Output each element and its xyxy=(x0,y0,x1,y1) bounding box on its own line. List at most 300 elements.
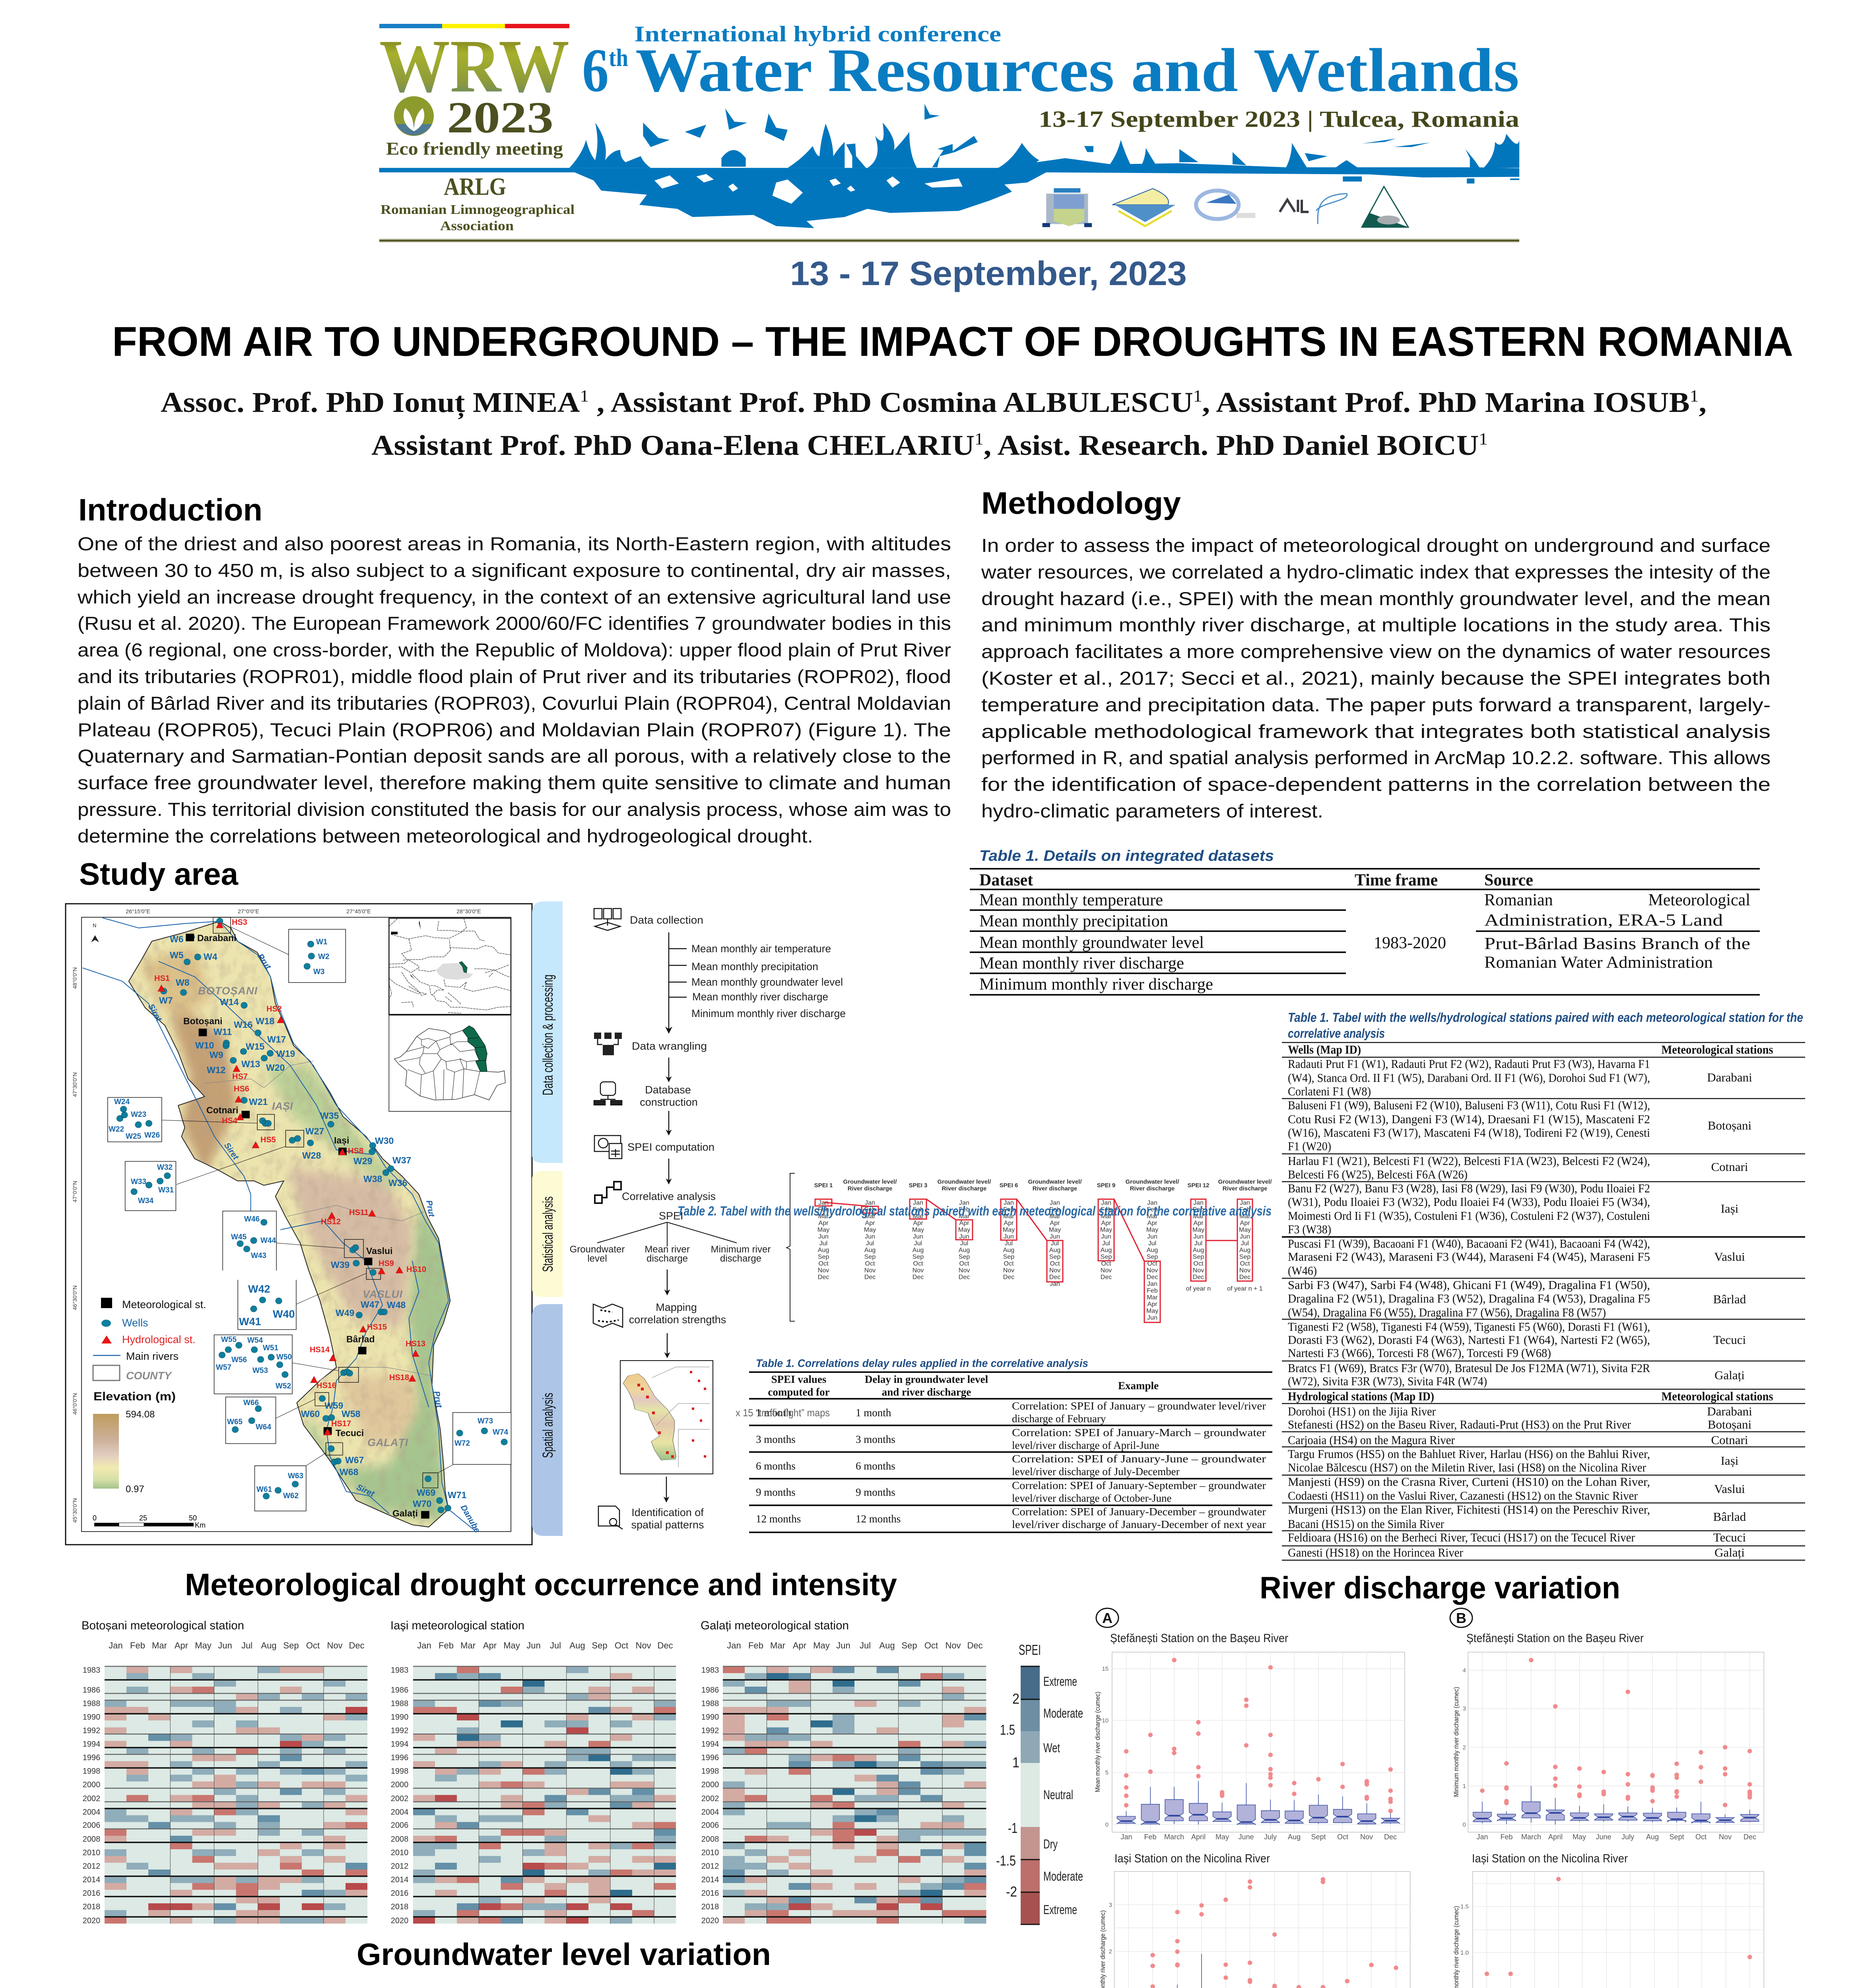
map labels: inset wells: W46 xyxy=(244,1215,260,1223)
SPEI branching xyxy=(597,1210,737,1246)
arrowhead xyxy=(665,1027,672,1034)
month columns: Dec xyxy=(1101,1274,1112,1281)
table text: Dataset xyxy=(979,871,1033,889)
map labels: inset wells: W2 xyxy=(318,953,329,961)
conference subtitle: International hybrid conference xyxy=(634,22,1001,47)
month axis: Apr xyxy=(793,1640,806,1650)
map labels: hydrological stations: HS7 xyxy=(232,1072,248,1081)
month columns: Apr xyxy=(959,1220,969,1227)
diagram headers: Groundwater level/ xyxy=(843,1178,897,1185)
month columns: Jan xyxy=(1050,1200,1060,1206)
table text: Prut-Bârlad Basins Branch of the xyxy=(1484,935,1750,953)
year axis: 2008 xyxy=(701,1835,719,1844)
logo year: 2023 xyxy=(447,93,553,142)
map graticule labels: 47°0'0"N xyxy=(72,1181,78,1202)
month columns: Jul xyxy=(819,1240,827,1247)
step: identification of spatial patterns: spatial patterns xyxy=(631,1519,704,1531)
table rows: 12 months xyxy=(856,1513,901,1525)
meteorological stations column: Meteorological stations xyxy=(1661,1043,1773,1056)
table header: and river discharge xyxy=(882,1386,971,1398)
year axis: 1990 xyxy=(83,1713,100,1722)
table header: SPEI values xyxy=(771,1373,826,1385)
year axis: 2014 xyxy=(391,1875,408,1884)
wells column: Targu Frumos (HS5) on the Bahluet River, Harlau (HS6) on the Bahlui River, xyxy=(1288,1447,1650,1461)
month columns: May xyxy=(912,1227,924,1233)
axis labels: 15 xyxy=(1102,1666,1109,1672)
axis labels: May xyxy=(1573,1833,1586,1841)
logo: ARLG shield xyxy=(1043,188,1092,227)
year axis: 1996 xyxy=(391,1753,408,1762)
month columns: Jun xyxy=(959,1233,969,1240)
text block: methodology body: hydro-climatic parameters of interest. xyxy=(981,800,1323,821)
collected datasets list: Mean monthly groundwater level xyxy=(691,976,843,988)
map labels: hydrological stations: HS14 xyxy=(310,1345,330,1354)
map labels: inset wells: W73 xyxy=(478,1417,493,1425)
month columns: Sep xyxy=(959,1254,970,1260)
month columns: Jul xyxy=(960,1240,968,1247)
axis labels: Oct xyxy=(1695,1833,1707,1841)
correlated variables: discharge xyxy=(720,1253,761,1264)
table rules xyxy=(749,1372,1272,1532)
map labels: inset wells: W52 xyxy=(276,1382,291,1390)
map labels: wells: W71 xyxy=(448,1490,467,1500)
month columns: Mar xyxy=(1147,1294,1158,1301)
map labels: inset wells: W53 xyxy=(252,1367,268,1375)
authors: , Asist. Research. PhD Daniel BOICU xyxy=(984,429,1479,461)
axis labels: 10 xyxy=(1102,1717,1109,1724)
step: SPEI computation: SPEI computation xyxy=(627,1141,714,1153)
diagram headers: River discharge xyxy=(942,1185,986,1192)
diagram headers: SPEI 3 xyxy=(909,1182,927,1189)
map labels: wells: W35 xyxy=(320,1110,339,1121)
month columns: of year n + 1 xyxy=(1227,1285,1263,1292)
month columns: Sep xyxy=(1239,1254,1250,1260)
wells column: Moimesti Ord Ii F1 (W35), Costuleni F1 (W36), Costuleni F2 (W37), Costuleni xyxy=(1288,1209,1650,1223)
meteorological stations column xyxy=(1661,1043,1773,1559)
map labels: hydrological stations: HS5 xyxy=(260,1136,276,1144)
month columns: Jun xyxy=(1240,1233,1250,1240)
year axis: 1990 xyxy=(701,1713,719,1722)
conference header banner xyxy=(379,22,1519,242)
year axis: 2006 xyxy=(83,1821,100,1830)
map labels: cities: Vaslui xyxy=(366,1246,392,1256)
table rows: 6 months xyxy=(756,1460,796,1472)
diagram headers: SPEI 6 xyxy=(1000,1182,1018,1189)
map labels: wells: W19 xyxy=(276,1048,295,1059)
axis labels: Aug xyxy=(1288,1833,1301,1841)
map labels: inset wells: W43 xyxy=(251,1252,266,1260)
map labels: wells: W27 xyxy=(305,1126,324,1136)
step: data wrangling: Data wrangling xyxy=(632,1040,707,1052)
legend class labels: Moderate xyxy=(1043,1706,1083,1720)
wells column: F3 (W38) xyxy=(1288,1222,1331,1236)
association name: Romanian Limnogeographical xyxy=(381,202,575,217)
diagram headers xyxy=(814,1178,1272,1192)
axis labels: 0 xyxy=(1105,1821,1109,1828)
table header: Example xyxy=(1118,1380,1159,1392)
month columns: Apr xyxy=(1147,1220,1157,1227)
month columns: Nov xyxy=(959,1267,970,1274)
month axis: Apr xyxy=(175,1640,188,1650)
map labels: hydrological stations: HS16 xyxy=(316,1381,336,1390)
month columns: Dec xyxy=(1239,1274,1250,1281)
legend class labels: Wet xyxy=(1043,1741,1060,1755)
meteorological stations column: Darabani xyxy=(1707,1404,1752,1418)
month axis: Feb xyxy=(439,1640,454,1650)
wells column: (W31), Podu Iloaiei F3 (W32), Podu Iloaiei F4 (W33), Podu Iloaiei F5 (W34), xyxy=(1288,1195,1650,1209)
map legend: 0.97 xyxy=(126,1484,144,1495)
diagram headers: SPEI 1 xyxy=(814,1182,833,1189)
year axis: 1994 xyxy=(701,1740,719,1749)
panel marker B xyxy=(1450,1608,1472,1627)
map labels: counties xyxy=(198,985,408,1448)
map labels: rivers: Prut xyxy=(256,952,273,971)
month columns: Oct xyxy=(819,1260,829,1267)
table title: Table 1. Details on integrated datasets xyxy=(979,848,1274,864)
table rows xyxy=(756,1400,1266,1530)
panel marker A: A xyxy=(1102,1610,1113,1626)
legend thresholds: -2 xyxy=(1006,1883,1017,1900)
table text: Administration, ERA-5 Land xyxy=(1484,911,1723,930)
chart title: Iași meteorological station xyxy=(390,1619,524,1632)
table title: Table 1. Correlations delay rules applied in the correlative analysis xyxy=(756,1357,1088,1369)
month axis: Jun xyxy=(526,1640,541,1650)
text block: methodology body: water resources, we correlated a hydro-climatic index that expresses the intesity of the xyxy=(981,561,1771,582)
month columns: Nov xyxy=(1101,1267,1112,1274)
wells column: Radauti Prut F1 (W1), Radauti Prut F2 (W2), Radauti Prut F3 (W3), Havarna F1 xyxy=(1288,1057,1650,1071)
text block: introduction body: area (6 regional, one cross-border, with the Republic of Moldova): upper flood plain of Prut River xyxy=(78,639,951,660)
month columns: Apr xyxy=(865,1220,875,1227)
map labels: inset wells: W34 xyxy=(138,1197,153,1205)
year axis: 1988 xyxy=(83,1699,100,1708)
chart title: Ștefănești Station on the Bașeu River xyxy=(1466,1632,1644,1645)
map labels: inset wells: W63 xyxy=(288,1472,303,1480)
axis labels: 2 xyxy=(1463,1744,1466,1751)
map labels: inset wells: W74 xyxy=(493,1428,508,1437)
authors: 1 xyxy=(1193,387,1202,406)
diagram headers: SPEI 12 xyxy=(1187,1182,1210,1189)
month columns: Feb xyxy=(959,1206,970,1213)
month axis: Aug xyxy=(569,1640,585,1650)
map graticule labels: 46°30'0"N xyxy=(72,1285,78,1310)
correlated variables: Groundwater xyxy=(570,1244,625,1255)
month axis: Nov xyxy=(635,1640,651,1650)
year axis: 2010 xyxy=(83,1848,100,1857)
table rows: level/river discharge of January-December of next year xyxy=(1012,1518,1266,1530)
month columns: Jun xyxy=(1147,1314,1157,1321)
legend thresholds: -1 xyxy=(1008,1820,1017,1836)
year axis: 1994 xyxy=(391,1740,408,1749)
region outline, rivers, county borders xyxy=(83,918,475,1530)
map labels: hydrological stations: HS15 xyxy=(367,1323,387,1332)
year axis: 2012 xyxy=(83,1862,100,1871)
map labels: hydrological stations: HS4 xyxy=(222,1116,238,1125)
month columns: Feb xyxy=(1147,1287,1158,1294)
wells column: Banu F2 (W27), Banu F3 (W28), Iasi F8 (W29), Iasi F9 (W30), Podu Iloaiei F2 xyxy=(1288,1181,1650,1195)
map labels: wells: W30 xyxy=(375,1136,394,1146)
map labels: wells: W5 xyxy=(170,950,184,960)
SPEI branching: SPEI xyxy=(659,1210,683,1222)
map labels: hydrological stations: HS1 xyxy=(154,974,170,983)
month columns: Aug xyxy=(1049,1247,1060,1254)
step: mapping xyxy=(629,1301,726,1326)
meteorological stations column: Tecuci xyxy=(1713,1530,1746,1544)
text block: introduction body: which yield an increase drought frequency, in the context of an extensive agricultural land use xyxy=(77,586,951,608)
month columns: Oct xyxy=(1194,1260,1204,1267)
month columns: May xyxy=(958,1227,970,1233)
table rows: discharge of February xyxy=(1012,1413,1106,1425)
meteorological stations column: Bârlad xyxy=(1713,1510,1746,1524)
year axis: 1988 xyxy=(701,1699,719,1708)
edition ordinal: 6 xyxy=(582,36,609,105)
axis labels: 3 xyxy=(1463,1705,1466,1712)
year axis: 2014 xyxy=(83,1875,100,1884)
month columns: Oct xyxy=(913,1260,923,1267)
correlated variables: Minimum river xyxy=(711,1244,771,1255)
heat cells xyxy=(723,1666,986,1924)
year axis: 1992 xyxy=(701,1726,719,1735)
text block: methodology body: for the identification of space-dependent patterns in the correlation between the xyxy=(981,774,1771,795)
month columns: Apr xyxy=(1101,1220,1111,1227)
map labels: inset wells: W57 xyxy=(216,1363,231,1372)
wells column: Puscasi F1 (W39), Bacaoani F1 (W40), Bacaoani F2 (W41), Bacaoani F4 (W42), xyxy=(1288,1237,1650,1250)
heading: Study area: Study area xyxy=(79,856,239,891)
legend class labels: Neutral xyxy=(1043,1788,1073,1802)
month columns: May xyxy=(1192,1227,1204,1233)
wells column: (W72), Sivita F3R (W73), Sivita F4R (W74) xyxy=(1288,1374,1487,1388)
month columns: Dec xyxy=(1003,1274,1014,1281)
map labels: wells: W16 xyxy=(234,1019,252,1030)
month columns: Jul xyxy=(914,1240,922,1247)
month columns: Nov xyxy=(1049,1267,1060,1274)
table text: Mean monthly precipitation xyxy=(979,912,1168,930)
table 2 caption (overlapping): Table 2. Tabel with the wells/hydrological stations paired with each meteorological station for the correlative analysis xyxy=(678,1204,1272,1218)
authors: , Assistant Prof. PhD Cosmina ALBULESCU xyxy=(589,386,1193,418)
month columns: Oct xyxy=(1004,1260,1014,1267)
year axis: 2008 xyxy=(83,1835,100,1844)
month columns: Apr xyxy=(1004,1220,1014,1227)
month columns: Aug xyxy=(1193,1247,1204,1254)
month columns: of year n xyxy=(1186,1285,1211,1292)
heading: Introduction: Introduction xyxy=(78,492,262,527)
year axis: 2018 xyxy=(83,1903,100,1911)
month columns: Mar xyxy=(1049,1213,1060,1220)
diagram headers: River discharge xyxy=(1033,1185,1077,1192)
year axis: 1986 xyxy=(83,1686,100,1695)
month columns: Aug xyxy=(913,1247,924,1254)
map labels: wells: W67 xyxy=(345,1455,364,1465)
map graticule labels: 47°30'0"N xyxy=(72,1072,78,1097)
heading: river discharge: River discharge variation xyxy=(1260,1570,1620,1605)
band: data collection and processing: Data collection & processing xyxy=(540,975,556,1095)
map labels: inset wells: W72 xyxy=(454,1439,470,1448)
authors: 1 xyxy=(580,387,589,406)
axis labels: March xyxy=(1521,1833,1541,1841)
month columns: Aug xyxy=(1239,1247,1250,1254)
map labels: inset wells: W23 xyxy=(131,1110,146,1119)
heat cells xyxy=(105,1666,367,1924)
month columns: Feb xyxy=(913,1206,924,1213)
month columns: Oct xyxy=(865,1260,875,1267)
map labels: wells: W59 xyxy=(324,1400,343,1411)
month columns: Apr xyxy=(1194,1220,1204,1227)
map labels: rivers: Siret xyxy=(355,1483,376,1499)
icon: database xyxy=(594,1082,622,1105)
axis labels: Nov xyxy=(1719,1833,1732,1841)
month columns: Dec xyxy=(818,1274,829,1281)
axis labels: 1.5 xyxy=(1460,1903,1469,1910)
month columns: Feb xyxy=(1239,1206,1250,1213)
diagram bracket xyxy=(786,1173,795,1321)
month columns: Jun xyxy=(1101,1233,1111,1240)
year axis: 2004 xyxy=(391,1808,408,1817)
year axis: 2020 xyxy=(83,1916,100,1925)
year axis: 2016 xyxy=(83,1889,100,1898)
delay rule diagram xyxy=(786,1173,1272,1322)
year axis: 2008 xyxy=(391,1835,408,1844)
map graticule labels xyxy=(72,908,481,1523)
text block: introduction body: between 30 to 450 m, is also subject to a significant exposure to continental, dry air masses, xyxy=(78,560,951,581)
wells column: Dragalina F2 (W51), Dragalina F3 (W52), Dragalina F4 (W53), Dragalina F5 xyxy=(1288,1291,1650,1305)
month columns: Apr xyxy=(819,1220,829,1227)
map labels: inset wells: W56 xyxy=(231,1356,247,1364)
legend colour bar xyxy=(1021,1666,1040,1924)
wells column: (W16), Mascateni F3 (W17), Mascateni F4 (W18), Todireni F2 (W19), Cenesti xyxy=(1288,1126,1650,1140)
wells column: Bratcs F1 (W69), Bratcs F3r (W70), Bratesul De Jos F12MA (W71), Sivita F2R xyxy=(1288,1361,1650,1375)
month axis: Apr xyxy=(483,1640,497,1650)
axis labels: 1.0 xyxy=(1460,1949,1469,1956)
month columns: Dec xyxy=(959,1274,970,1281)
text block: introduction body: surface free groundwater level, therefore making them quite sensitive to climate and human xyxy=(78,772,951,793)
month columns: Jan xyxy=(1193,1200,1204,1206)
month columns: Mar xyxy=(1101,1213,1112,1220)
map labels: wells: W29 xyxy=(353,1156,372,1166)
map labels: inset wells: W22 xyxy=(109,1125,124,1134)
wells column: Ganesti (HS18) on the Horincea River xyxy=(1288,1545,1464,1559)
table: wells and stations pairing xyxy=(1282,1010,1805,1560)
map north arrow: N xyxy=(93,922,96,928)
step: identification of spatial patterns: Identification of xyxy=(631,1507,704,1518)
axis labels: Nov xyxy=(1360,1833,1373,1841)
meteorological stations column: Iași xyxy=(1721,1202,1739,1215)
wells column: (W54), Dragalina F6 (W55), Dragalina F7 (W56), Dragalina F8 (W57) xyxy=(1288,1305,1606,1319)
collected datasets list: Minimum monthly river discharge xyxy=(691,1008,846,1019)
month columns: Jan xyxy=(818,1200,829,1206)
map labels: wells: W47 xyxy=(361,1299,379,1310)
red delay boxes xyxy=(815,1199,1252,1322)
arrow: database to SPEI xyxy=(668,1111,669,1134)
map legend: Meteorological st. xyxy=(122,1299,206,1310)
map labels: wells: W42 xyxy=(248,1283,270,1295)
text block: methodology body: temperature and precipitation data. The paper puts forward a transparent, largely- xyxy=(981,694,1771,715)
axis labels: June xyxy=(1238,1833,1254,1841)
month columns: Oct xyxy=(1101,1260,1111,1267)
leaf emblem xyxy=(394,96,434,136)
year axis: 2004 xyxy=(83,1808,100,1817)
edition ordinal: th xyxy=(609,45,628,72)
month columns: Mar xyxy=(818,1213,829,1220)
table rows: 3 months xyxy=(856,1433,895,1445)
authors: 1 xyxy=(975,430,984,448)
month columns: Dec xyxy=(1147,1274,1158,1281)
month axis: Aug xyxy=(261,1640,277,1650)
month columns: Sep xyxy=(864,1254,876,1260)
year axis: 2006 xyxy=(391,1821,408,1830)
year axis: 2012 xyxy=(391,1862,408,1871)
month columns: May xyxy=(817,1227,829,1233)
table rows: 1 month xyxy=(856,1407,891,1419)
map labels: wells: W39 xyxy=(331,1260,349,1270)
authors xyxy=(161,386,1707,461)
wells column: Corlateni F1 (W8) xyxy=(1288,1084,1371,1098)
meteorological stations column: Vaslui xyxy=(1714,1482,1745,1496)
eco friendly tagline: Eco friendly meeting xyxy=(386,138,563,159)
map legend: Elevation (m) xyxy=(93,1390,176,1403)
Romanian flag colour bar xyxy=(379,24,569,28)
month columns: Mar xyxy=(1003,1213,1014,1220)
wells column: F1 (W20) xyxy=(1288,1139,1331,1153)
legend class labels: Moderate xyxy=(1043,1869,1083,1883)
correlated variables: level xyxy=(587,1253,607,1264)
diagram headers: Groundwater level/ xyxy=(937,1178,991,1185)
wells column: Belcesti F6 (W25), Belcesti F6A (W26) xyxy=(1288,1167,1468,1181)
month columns xyxy=(817,1200,1263,1321)
year axis: 2006 xyxy=(701,1821,719,1830)
month columns: Aug xyxy=(864,1247,876,1254)
axis labels: Jan xyxy=(1476,1833,1488,1841)
axis labels: Jan xyxy=(1120,1833,1132,1841)
month columns: Mar xyxy=(959,1213,970,1220)
workflow phase bands xyxy=(532,901,563,1536)
logo: AIL xyxy=(1280,194,1347,224)
text block: methodology body: In order to assess the impact of meteorological drought on underground and surface xyxy=(981,535,1771,556)
axis labels: 2 xyxy=(1109,1948,1112,1955)
map labels: wells: W60 xyxy=(301,1409,320,1419)
year axis: 1994 xyxy=(83,1740,100,1749)
month columns: Oct xyxy=(959,1260,969,1267)
month columns: Jul xyxy=(1194,1240,1202,1247)
diagram headers: Groundwater level/ xyxy=(1028,1178,1082,1185)
arrow: wrangling to database xyxy=(668,1058,669,1081)
map labels: rivers: Danube xyxy=(459,1503,482,1534)
month axis: Dec xyxy=(967,1640,983,1650)
wells column: Stefanesti (HS2) on the Baseu River, Radauti-Prut (HS3) on the Prut River xyxy=(1288,1417,1631,1431)
chart title: Iași Station on the Nicolina River xyxy=(1472,1852,1628,1865)
year axis: 2016 xyxy=(701,1889,719,1898)
month axis: Sep xyxy=(901,1640,917,1650)
map legend: Wells xyxy=(122,1317,148,1329)
map labels: wells: W4 xyxy=(204,951,217,962)
month columns: Jan xyxy=(1147,1281,1157,1287)
text block: methodology body: (Koster et al., 2017; Secci et al., 2021), mainly because the SPEI integrates both xyxy=(981,668,1771,689)
month columns: Aug xyxy=(1101,1247,1112,1254)
axis labels: 4 xyxy=(1463,1667,1466,1674)
month columns: Sep xyxy=(1003,1254,1014,1260)
text block: introduction body xyxy=(77,533,951,846)
table rules xyxy=(970,869,1760,995)
axis labels: Dec xyxy=(1384,1833,1397,1841)
heatmap: Galați xyxy=(701,1619,986,1925)
month axis: Mar xyxy=(460,1640,476,1650)
axis labels: Aug xyxy=(1646,1833,1659,1841)
month axis: Jun xyxy=(218,1640,232,1650)
arrow: collection to wrangling xyxy=(669,932,687,1032)
axis labels: 1 xyxy=(1463,1783,1466,1790)
poster title: FROM AIR TO UNDERGROUND – THE IMPACT OF DROUGHTS IN EASTERN ROMANIA xyxy=(112,318,1793,365)
authors: Assoc. Prof. PhD Ionuț MINEA xyxy=(161,386,547,418)
meteorological stations column: Botoșani xyxy=(1708,1118,1751,1132)
map labels: inset wells: W26 xyxy=(144,1131,160,1140)
